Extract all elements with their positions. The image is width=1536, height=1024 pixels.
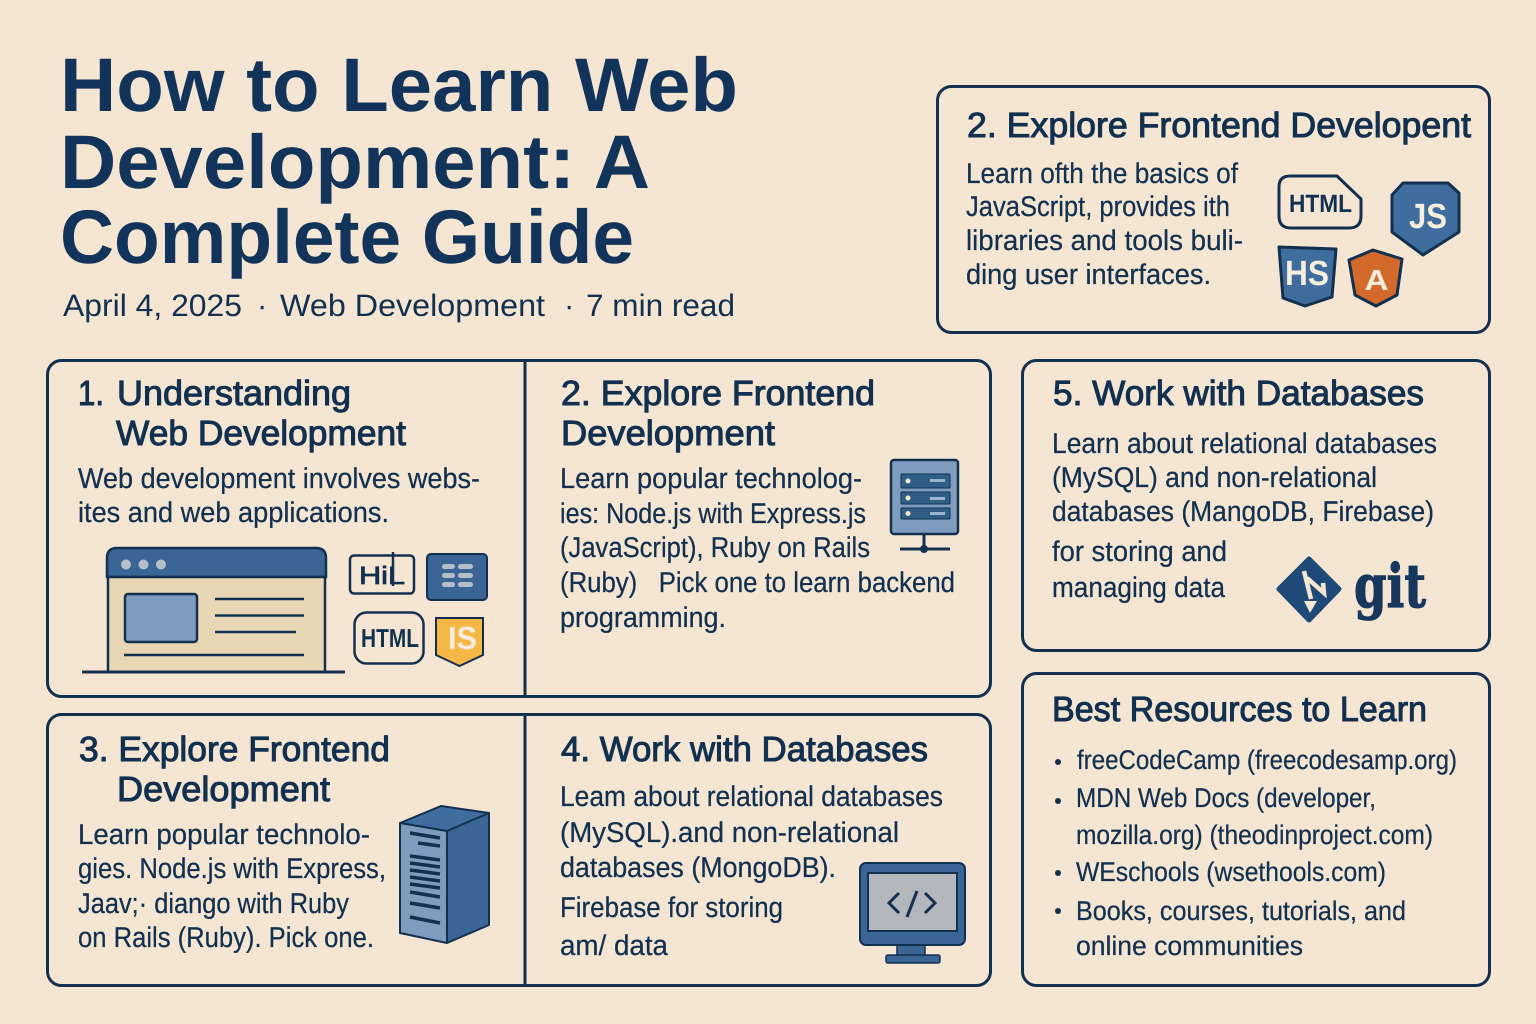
text block: step 2: Learn popular technolog- [560,463,862,495]
text block: step 5: managing data [1052,572,1225,604]
icon: layout list box [427,554,487,600]
icon: browser window [82,548,345,672]
text block: step 3: gies. Node.js with Express, [78,853,386,885]
heading: step 1: Web Development [116,414,406,453]
text block: step 3: on Rails (Ruby). Pick one. [78,922,374,954]
list: resources: MDN Web Docs (developer, [1076,783,1376,813]
text block: step 5 [1052,428,1437,604]
text block: frontend description: ding user interfaces. [966,259,1211,291]
article meta line: · [564,288,574,323]
text block: step 3 [78,819,386,954]
text block: step 4 [560,781,943,962]
icon: code monitor [860,863,965,963]
article meta line: April 4, 2025 [63,288,242,323]
panel: steps 3 and 4 [48,714,990,986]
panel: frontend technologies [938,86,1490,332]
text block: step 4: Leam about relational databases [560,781,943,813]
heading: step 1 [78,374,406,453]
text block: step 2: programming. [560,602,726,634]
icon: Angular badge [1349,250,1402,306]
heading: step 4: 4. Work with Databases [561,730,928,769]
list: resources: Books, courses, tutorials, and [1076,896,1406,926]
icon: Angular badge: A [1364,265,1389,297]
panel: best resources [1022,674,1490,986]
article meta line: Web Development [280,288,545,323]
panel: step 5 databases [1022,360,1490,650]
panel: steps 1 and 2 [48,360,990,696]
heading: step 3: 3. Explore Frontend [79,730,390,769]
list: resources: WEschools (wsethools.com) [1076,857,1386,887]
list: resources: freeCodeCamp (freecodesamp.org) [1077,745,1457,775]
text block: step 2 [560,463,955,634]
icon: git logo: git [1354,552,1426,622]
heading: step 5: 5. Work with Databases [1053,374,1424,413]
text block: frontend description: libraries and tools buli- [966,225,1243,257]
heading: step 2: 2. Explore Frontend [561,374,875,413]
icon: JS badge [1392,183,1459,255]
text block: step 1 [78,463,480,529]
icon: HS badge [1279,247,1336,306]
icon: code tag box: HiL [359,562,405,590]
heading: explore frontend: 2. Explore Frontend Developent [967,106,1471,145]
text block: step 4: databases (MongoDB). [560,852,836,884]
icon: HTML tag: HTML [1289,190,1352,218]
text block: step 5: Learn about relational databases [1052,428,1437,460]
heading: step 2 [561,374,875,453]
title: Complete Guide [60,195,634,280]
text block: step 4: am/ data [560,930,668,962]
icon: code tag box [350,552,414,594]
list: resources: online communities [1076,931,1303,961]
icon: server tower [400,806,489,943]
text block: step 3: Learn popular technolo- [78,819,370,851]
icon: JS shield: IS [448,620,477,656]
heading: step 3 [79,730,390,809]
heading: resources: Best Resources to Learn [1052,690,1427,729]
text block: step 4: (MySQL).and non-relational [560,817,899,849]
text block: frontend description: Learn ofth the basics of [966,158,1238,190]
text block: step 1: ites and web applications. [78,497,389,529]
heading: step 3: Development [117,770,330,809]
list: resources: mozilla.org) (theodinproject.com) [1076,820,1433,850]
icon: HTML tag [1279,176,1361,228]
text block: frontend description: JavaScript, provides ith [966,191,1230,223]
text block: step 5: (MySQL) and non-relational [1052,462,1377,494]
heading: step 1: 1. [78,374,104,413]
article meta line: · [257,288,267,323]
text block: step 3: Jaav;· diango with Ruby [78,888,350,920]
article meta line: 7 min read [586,288,735,323]
icon: JS badge: JS [1409,197,1447,236]
icon: git logo [1279,552,1426,622]
text block: step 5: for storing and [1052,536,1227,568]
text block: step 4: Firebase for storing [560,892,783,924]
text block: step 1: Web development involves webs- [78,463,480,495]
heading: step 2: Development [561,414,775,453]
heading: step 1: Understanding [117,374,351,413]
article meta line [63,288,735,323]
title: How to Learn Web [60,43,738,128]
text block: frontend description [966,158,1243,291]
icon: HS badge: HS [1285,254,1329,293]
list: resources [1055,745,1457,961]
text block: step 2: ies: Node.js with Express.js [560,498,866,530]
title [60,43,738,280]
title: Development: A [60,120,650,205]
text block: step 2: (JavaScript), Ruby on Rails [560,532,870,564]
icon: JS shield [436,618,483,666]
icon: HTML badge: HTML [361,623,419,653]
text block: step 2: (Ruby) Pick one to learn backend [560,567,955,599]
text block: step 5: databases (MangoDB, Firebase) [1052,496,1434,528]
icon: HTML badge [354,612,424,664]
icon: server rack [891,460,958,553]
